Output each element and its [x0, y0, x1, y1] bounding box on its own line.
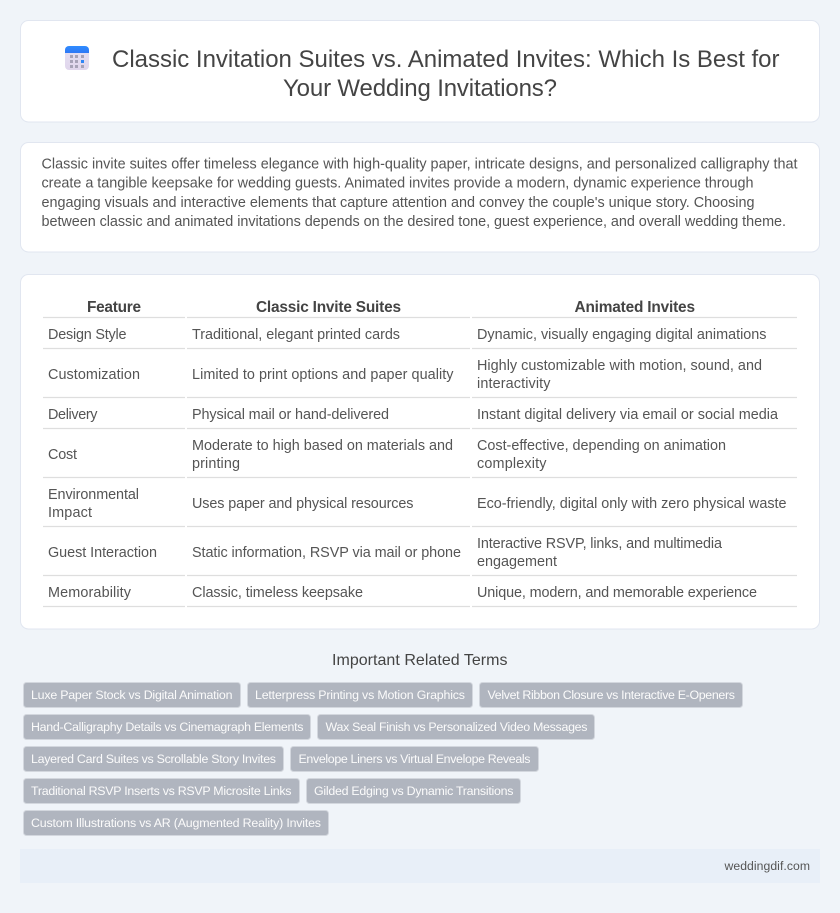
table row: environmental impact: Uses paper and physical resources — [192, 496, 414, 512]
table row: cost: Moderate to high based on materials and — [192, 438, 453, 454]
icon: calendar — [65, 46, 89, 70]
table header row: Feature — [87, 299, 141, 316]
table row: environmental impact: Impact — [48, 505, 92, 521]
text block: introduction paragraph: Classic invite suites offer timeless elegance with high-quality paper, intricate designs, and personalized calligraphy that — [42, 156, 798, 172]
panel: introduction — [20, 142, 820, 252]
table row: cost: Cost-effective, depending on animation — [477, 438, 726, 454]
table row: guest interaction: Interactive RSVP, links, and multimedia — [477, 536, 722, 552]
tag — [306, 778, 520, 804]
footer — [20, 849, 820, 883]
table row: memorability — [48, 585, 757, 601]
tag — [24, 682, 240, 708]
table row: guest interaction: Guest Interaction — [48, 545, 157, 561]
table row: memorability: Classic, timeless keepsake — [192, 585, 363, 601]
table row: cost: Cost — [48, 447, 77, 463]
tag — [480, 682, 742, 708]
tag: Layered Card Suites vs Scrollable Story Invites — [31, 752, 276, 766]
tag — [24, 778, 300, 804]
table row: customization: Limited to print options and paper quality — [192, 367, 454, 383]
tag: Custom Illustrations vs AR (Augmented Reality) Invites — [31, 816, 321, 830]
table row: design style: Traditional, elegant printed cards — [192, 327, 400, 343]
tag — [24, 746, 284, 772]
table row: environmental impact: Environmental — [48, 487, 139, 503]
footer source text: weddingdif.com — [724, 859, 810, 873]
table row: environmental impact — [48, 487, 786, 521]
table row: customization: interactivity — [477, 376, 551, 392]
table row: guest interaction: Static information, RSVP via mail or phone — [192, 545, 461, 561]
table row: customization: Highly customizable with motion, sound, and — [477, 358, 762, 374]
title: Classic Invitation Suites vs. Animated Invites: Which Is Best for — [112, 46, 780, 73]
tag: Velvet Ribbon Closure vs Interactive E-Openers — [488, 688, 735, 702]
table row: cost — [48, 438, 726, 472]
table row: design style: Design Style — [48, 327, 126, 343]
table row: delivery: Physical mail or hand-delivered — [192, 407, 389, 423]
table row: delivery: Instant digital delivery via email or social media — [477, 407, 778, 423]
tag: Hand-Calligraphy Details vs Cinemagraph Elements — [31, 720, 304, 734]
table row: memorability: Unique, modern, and memorable experience — [477, 585, 757, 601]
tag — [24, 714, 310, 740]
related terms tags — [24, 682, 742, 836]
table row: delivery: Delivery — [48, 407, 98, 423]
tag — [290, 746, 538, 772]
table row: memorability: Memorability — [48, 585, 132, 601]
tag — [248, 682, 472, 708]
tag — [24, 810, 328, 836]
panel: title header — [20, 20, 820, 122]
table header row — [87, 299, 695, 316]
table row: design style: Dynamic, visually engaging digital animations — [477, 327, 766, 343]
title: Your Wedding Invitations? — [283, 75, 557, 102]
text block: introduction paragraph: engaging visuals and interactive elements that capture attention and convey the couple's unique story. Choosing — [42, 195, 754, 211]
table row: customization: Customization — [48, 367, 140, 383]
text block: introduction paragraph — [42, 156, 798, 230]
table row: cost: printing — [192, 456, 240, 472]
panel: comparison table — [20, 274, 820, 629]
tag — [318, 714, 594, 740]
tag: Letterpress Printing vs Motion Graphics — [255, 688, 465, 702]
text block: introduction paragraph: create a tangible keepsake for wedding guests. Animated invites provide a modern, dynamic experience through — [42, 176, 754, 192]
text block: introduction paragraph: between classic and animated invitations depends on the desired tone, guest experience, and overall wedding theme. — [42, 214, 786, 230]
table row: customization — [48, 358, 762, 392]
table row: guest interaction: engagement — [477, 554, 557, 570]
table row: guest interaction — [48, 536, 722, 570]
tag: Envelope Liners vs Virtual Envelope Reveals — [298, 752, 530, 766]
tag: Traditional RSVP Inserts vs RSVP Microsite Links — [31, 784, 292, 798]
table row: design style — [48, 327, 766, 343]
table row: delivery — [48, 407, 778, 423]
table header row: Animated Invites — [574, 299, 695, 316]
table header row: Classic Invite Suites — [256, 299, 401, 316]
table row: cost: complexity — [477, 456, 547, 472]
tag: Gilded Edging vs Dynamic Transitions — [314, 784, 514, 798]
tag: Luxe Paper Stock vs Digital Animation — [31, 688, 233, 702]
heading: important related terms: Important Related Terms — [332, 652, 508, 669]
title — [112, 46, 780, 102]
table row: environmental impact: Eco-friendly, digital only with zero physical waste — [477, 496, 786, 512]
tag: Wax Seal Finish vs Personalized Video Messages — [326, 720, 588, 734]
